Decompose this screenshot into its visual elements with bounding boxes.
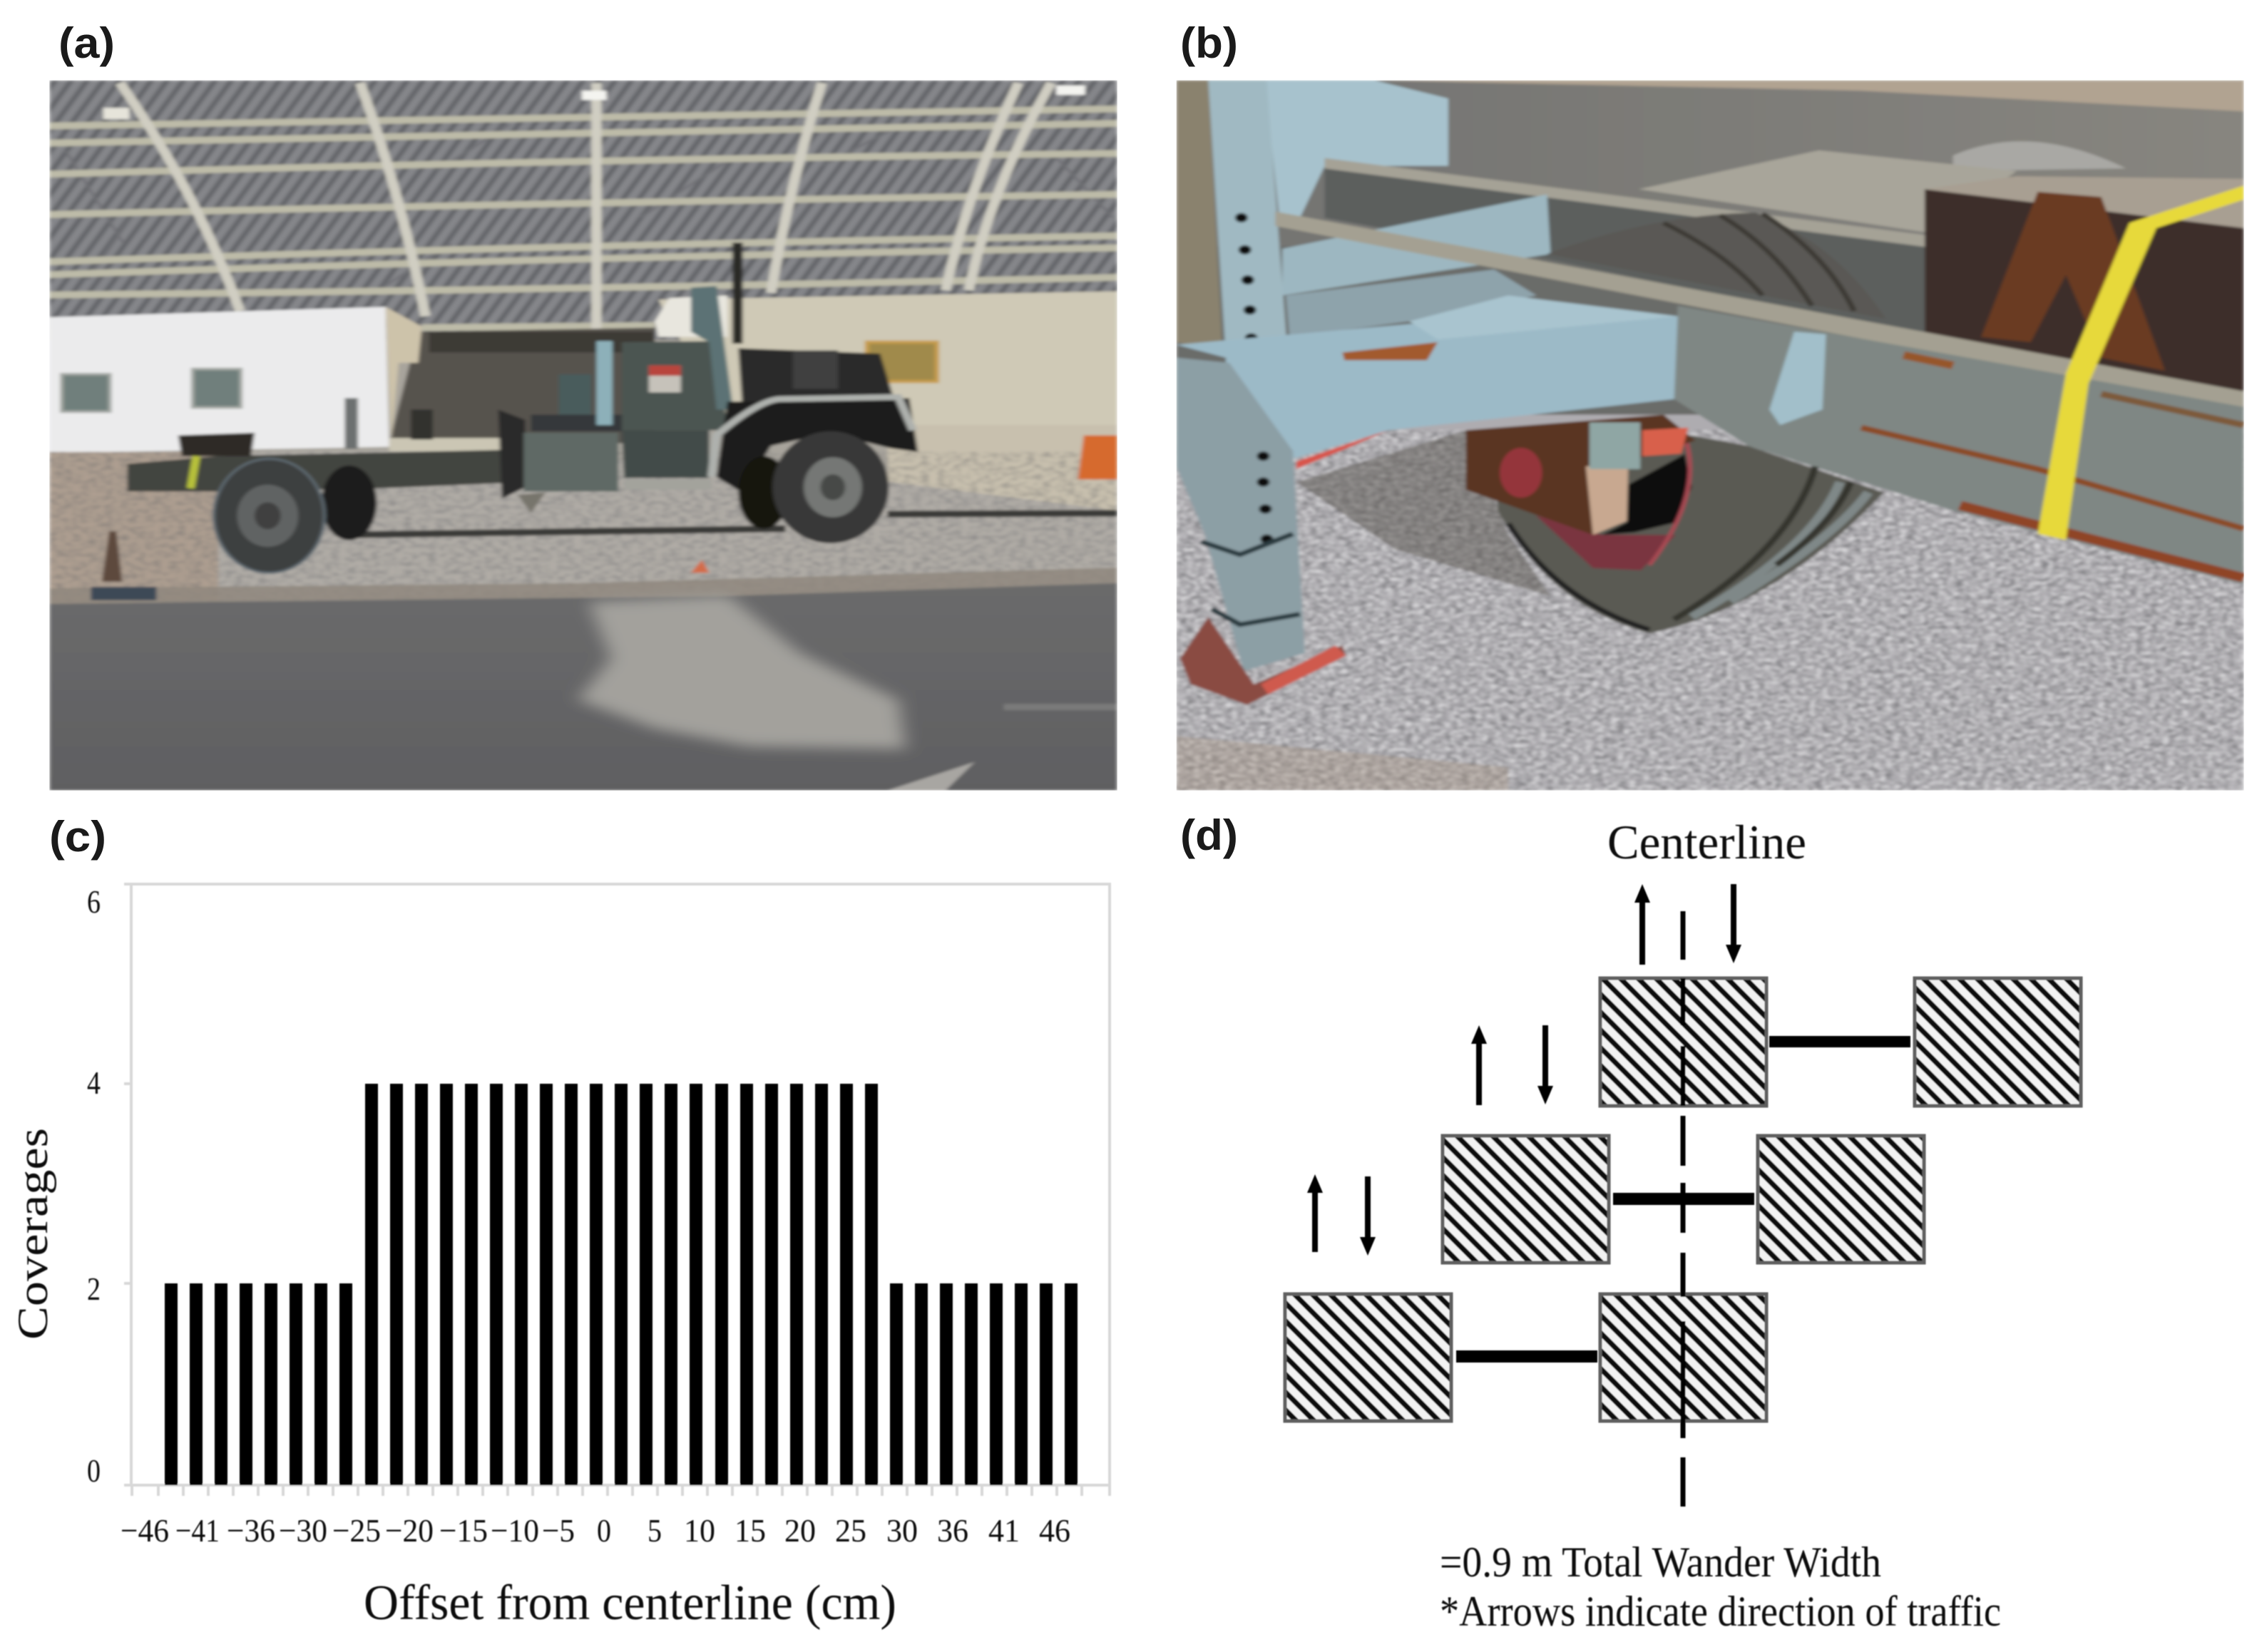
x-axis tick labels: 36	[937, 1512, 968, 1549]
y-axis tick labels	[87, 883, 101, 1489]
y-axis tick labels: 6	[87, 883, 101, 920]
x-axis tick labels: −30	[279, 1512, 327, 1549]
dashed centerline	[1680, 911, 1686, 1507]
x-axis tick labels: 10	[684, 1512, 715, 1549]
bars	[165, 1084, 1078, 1485]
far-left post and bracket	[1177, 81, 1222, 352]
lower post	[1177, 358, 1305, 671]
arrow note: *Arrows indicate direction of traffic	[1440, 1588, 2001, 1635]
x-axis tick labels	[121, 1512, 1070, 1549]
x-axis tick labels: −15	[439, 1512, 488, 1549]
x-axis tick labels: −20	[385, 1512, 434, 1549]
dark interior	[389, 327, 655, 443]
x-axis tick labels: 20	[784, 1512, 816, 1549]
traffic direction arrows	[1315, 884, 1734, 1252]
pavement	[49, 583, 1117, 791]
interior frame	[1325, 158, 1932, 332]
x-axis tick labels: 15	[735, 1512, 766, 1549]
truck	[127, 242, 918, 573]
axles	[1456, 1036, 1910, 1363]
hub bracket	[1466, 415, 1695, 535]
panel label: (c): (c)	[49, 813, 106, 861]
chart (c): coverages versus offset from centerline	[9, 883, 1110, 1631]
centerline label: Centerline	[1607, 815, 1806, 869]
plot frame and ticks	[124, 884, 1110, 1496]
y-axis title: Coverages	[9, 1128, 56, 1340]
wander width note: =0.9 m Total Wander Width	[1440, 1539, 1881, 1586]
panel label: (a): (a)	[58, 19, 115, 67]
back floor	[887, 425, 1117, 513]
x-axis tick labels: 0	[597, 1512, 611, 1549]
diagonal bar	[1275, 212, 2244, 412]
concrete block	[1925, 176, 2244, 233]
diagram (d): wander pattern of axle passes	[1285, 815, 2081, 1635]
yellow strap	[2038, 185, 2244, 540]
gravel	[1177, 415, 2244, 791]
top plate	[1639, 150, 2017, 233]
gray main beam	[1674, 306, 2244, 585]
x-axis tick labels: −46	[121, 1512, 169, 1549]
x-axis tick labels: −25	[332, 1512, 381, 1549]
x-axis tick labels: −5	[542, 1512, 575, 1549]
panel label: (b): (b)	[1180, 19, 1238, 67]
x-axis title: Offset from centerline (cm)	[364, 1576, 896, 1631]
white building	[49, 307, 389, 453]
x-axis tick labels: −36	[227, 1512, 275, 1549]
y-axis tick labels: 0	[87, 1452, 101, 1489]
panel label: (d): (d)	[1180, 811, 1238, 859]
x-axis tick labels: 25	[835, 1512, 866, 1549]
background pavement	[1177, 81, 2244, 246]
back wheel	[1953, 141, 2126, 171]
upper tire	[1547, 212, 1886, 319]
y-axis tick labels: 4	[87, 1064, 101, 1101]
x-axis tick labels: 41	[988, 1512, 1020, 1549]
x-axis tick labels: 30	[886, 1512, 918, 1549]
x-axis tick labels: −10	[491, 1512, 539, 1549]
beige building	[658, 292, 1117, 426]
lower tire	[1494, 436, 1884, 633]
gravel	[49, 451, 1117, 604]
photo (b): rear axle and weighted frame close-up	[1177, 81, 2244, 791]
tire footprints	[1285, 978, 2081, 1421]
x-axis tick labels: 5	[648, 1512, 662, 1549]
x-axis tick labels: −41	[175, 1512, 220, 1549]
ceiling	[49, 81, 1117, 342]
photo (a): military truck chassis in a hangar	[49, 81, 1117, 791]
y-axis tick labels: 2	[87, 1271, 101, 1307]
blue crossmember	[1177, 316, 1678, 458]
x-axis tick labels: 46	[1039, 1512, 1070, 1549]
